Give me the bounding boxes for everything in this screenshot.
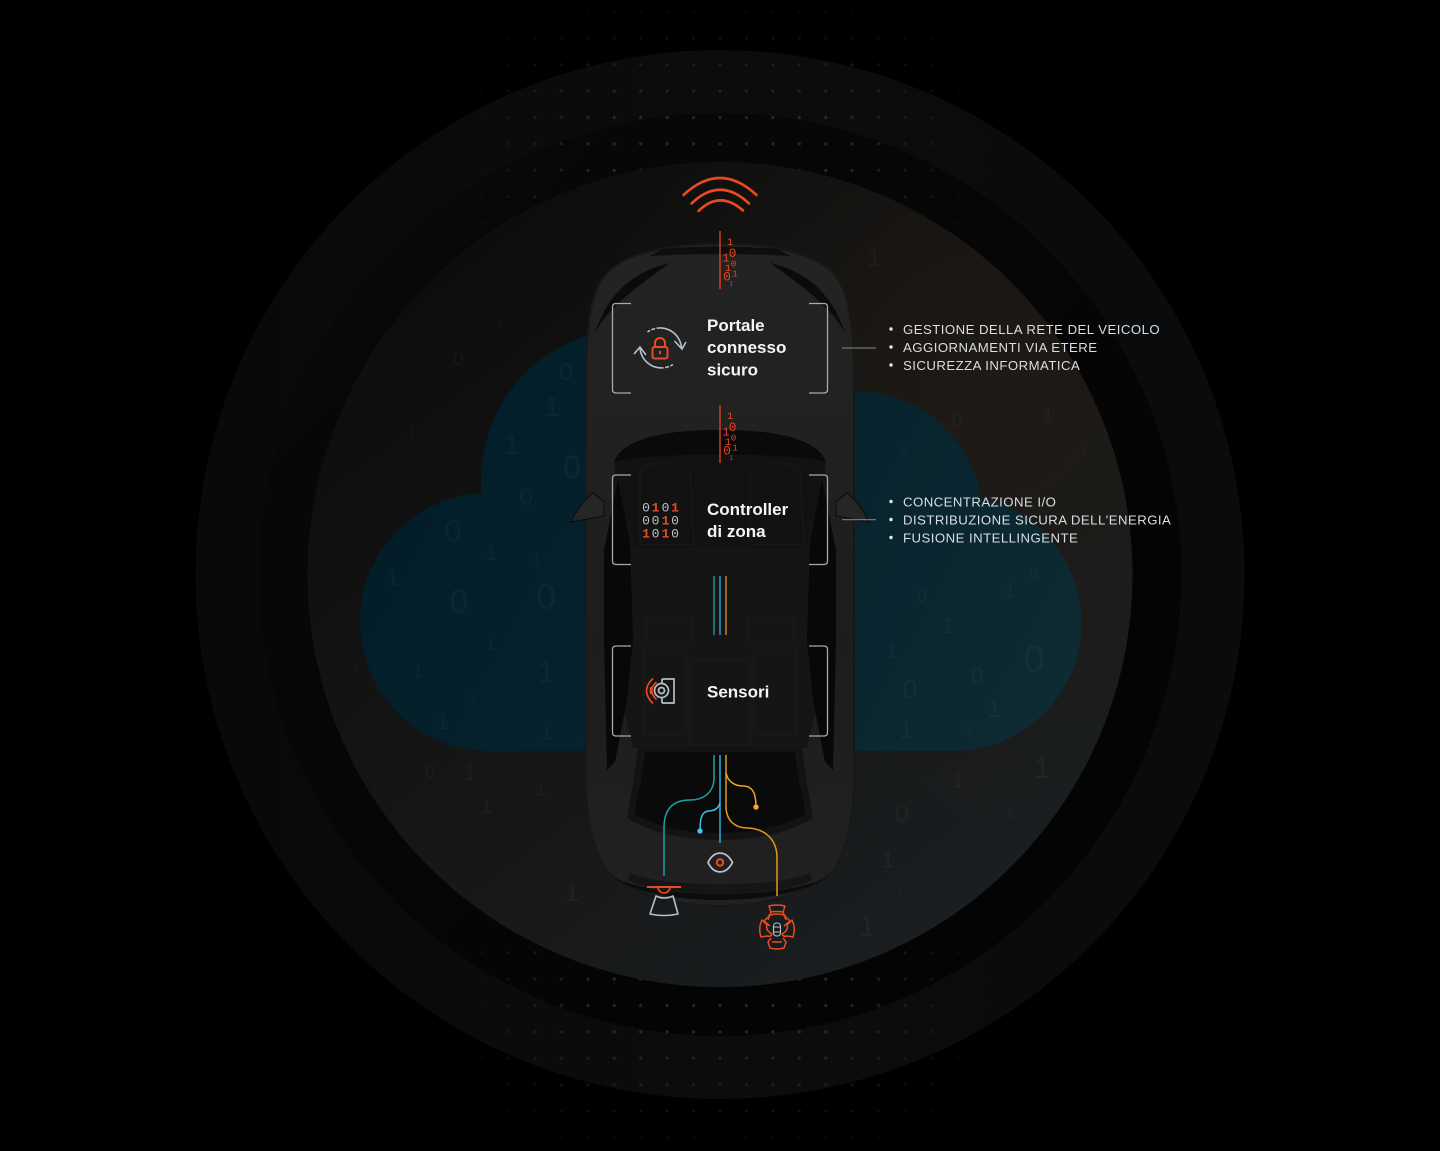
icon: binary grid: 1 [671, 500, 679, 516]
panel: portale connesso sicuro [612, 304, 828, 393]
heading: Controller [707, 500, 789, 519]
data stream: middle: 1 [727, 411, 733, 423]
floating binary digits: 1 [882, 848, 894, 873]
floating binary digits: 0 [917, 586, 927, 606]
floating binary digits: 0 [903, 674, 917, 704]
data stream: middle: 1 [729, 454, 733, 462]
dot grid [507, 36, 933, 1112]
floating binary digits: 1 [1006, 806, 1014, 822]
icon: binary grid: 1 [642, 526, 650, 542]
floating binary digits: 1 [504, 429, 520, 460]
icon: binary grid: 0 [671, 514, 679, 528]
sensor wiring [664, 755, 777, 896]
data lines: zone to sensors [713, 576, 727, 635]
floating binary digits: 1 [886, 641, 898, 663]
icon: binary grid: 1 [662, 526, 670, 542]
heading: Portale [707, 316, 765, 335]
floating binary digits: 0 [536, 576, 556, 617]
data stream: top: 1 [723, 252, 730, 266]
floating binary digits: 1 [967, 722, 974, 736]
callout: controller features: CONCENTRAZIONE I/O [903, 494, 1056, 510]
floating binary digits: 1 [497, 316, 504, 330]
floating binary digits: 1 [470, 693, 476, 705]
floating binary digits: 0 [452, 348, 464, 370]
floating binary digits: 0 [450, 583, 468, 621]
floating binary digits: 1 [987, 696, 1001, 723]
floating binary digits: 1 [1004, 580, 1016, 602]
icon: binary grid: 1 [662, 514, 670, 528]
floating binary digits: 1 [464, 760, 476, 785]
cabin [607, 430, 833, 748]
floating binary digits: 1 [952, 768, 964, 793]
floating binary digits: 1 [867, 245, 881, 272]
heading: connesso [707, 338, 786, 357]
data stream: middle: 0 [731, 432, 737, 444]
floating binary digits: 1 [532, 550, 540, 566]
floating binary digits: 0 [1030, 566, 1038, 582]
rear bumper [628, 873, 812, 894]
icon: wifi [684, 178, 756, 211]
data stream: top: 1 [729, 280, 733, 288]
floating binary digits: 0 [971, 663, 983, 688]
icon: lock with sync arrows [634, 328, 686, 368]
heading: sicuro [707, 360, 758, 380]
icon: binary grid: 0 [662, 500, 669, 516]
hood creases [650, 246, 790, 256]
data stream: middle [719, 405, 738, 463]
floating binary digits: 0 [952, 410, 962, 430]
data stream: middle: 1 [723, 426, 730, 440]
data stream: top: 0 [731, 258, 737, 270]
floating binary digits: 0 [1023, 639, 1045, 681]
mirrors [571, 493, 869, 522]
data stream: middle: 0 [723, 444, 731, 458]
icon: binary grid [642, 500, 679, 542]
floating binary digits: 1 [1081, 444, 1088, 458]
data stream: top: 0 [729, 246, 736, 261]
icon: binary grid: 1 [652, 500, 660, 516]
side windows [604, 480, 836, 770]
icon: eye [708, 853, 732, 872]
callout: controller features: DISTRIBUZIONE SICURA DELL'ENERGIA [903, 512, 1171, 528]
floating binary digits: 1 [859, 911, 875, 942]
floating binary digits: 0 [559, 359, 573, 386]
rear window [627, 747, 813, 840]
data stream: top: 1 [732, 268, 738, 280]
data stream: top: 0 [723, 270, 731, 284]
callout: controller features: FUSIONE INTELLINGENTE [903, 530, 1078, 546]
data stream: top [719, 231, 738, 289]
icon: sensor [646, 678, 674, 704]
floating binary digits: 1 [362, 476, 368, 488]
seats [640, 462, 804, 745]
data stream: middle: 1 [732, 442, 738, 454]
heading: Sensori [707, 682, 769, 702]
callout: controller features [842, 494, 1171, 546]
floating binary digits: 1 [942, 613, 954, 638]
floating binary digits: 1 [387, 565, 399, 590]
floating binary digits: 1 [413, 661, 423, 681]
concentric circles backdrop [196, 50, 1244, 1099]
icon: binary grid: 0 [652, 526, 659, 542]
heading: di zona [707, 522, 766, 541]
floating binary digits: 1 [437, 709, 449, 734]
floating binary digits: 1 [486, 544, 496, 564]
floating binary digits: 1 [538, 656, 554, 689]
icon: camera [647, 887, 681, 916]
floating binary digits: 0 [895, 801, 909, 828]
data stream: middle: 1 [725, 437, 731, 449]
data stream: top: 1 [727, 237, 733, 249]
data stream: top: 1 [725, 263, 731, 275]
panel: sensori [612, 646, 828, 736]
floating binary digits: 1 [1043, 405, 1053, 425]
floating binary digits: 1 [487, 636, 495, 652]
icon: binary grid: 0 [642, 514, 650, 528]
floating binary digits: 0 [563, 449, 581, 485]
floating binary digits: 1 [899, 717, 913, 744]
floating binary digits: 0 [425, 762, 435, 782]
floating binary digits: 1 [537, 782, 545, 798]
car body [586, 244, 854, 906]
panel: controller di zona [612, 475, 828, 564]
floating binary digits: 1 [352, 659, 359, 673]
floating binary digits: 1 [565, 877, 579, 907]
floating binary digits: 1 [409, 427, 416, 441]
windshield [614, 430, 826, 548]
floating binary digits: 1 [542, 723, 552, 743]
data stream: middle: 0 [729, 420, 736, 435]
floating binary digits: 1 [898, 889, 905, 903]
callout: portale features: AGGIORNAMENTI VIA ETERE [903, 340, 1098, 355]
inner disk [308, 162, 1132, 987]
floating binary digits: 1 [1034, 752, 1050, 785]
floating binary digits: 0 [519, 484, 533, 511]
cloud [360, 328, 1081, 751]
icon: binary grid: 0 [652, 514, 659, 528]
callout: portale features: GESTIONE DELLA RETE DEL VEICOLO [903, 322, 1160, 337]
callout: portale features: SICUREZZA INFORMATICA [903, 358, 1080, 373]
floating binary digits: 1 [481, 796, 493, 818]
icon: surround radar [760, 905, 794, 949]
icon: binary grid: 0 [642, 500, 650, 516]
floating binary digits: 1 [544, 391, 560, 422]
icon: binary grid: 0 [671, 526, 679, 542]
callout: portale features [842, 322, 1160, 373]
floating binary digits: 0 [900, 442, 908, 458]
car top view [571, 244, 869, 906]
floating binary digits [352, 245, 1088, 942]
floating binary digits: 0 [445, 515, 461, 548]
